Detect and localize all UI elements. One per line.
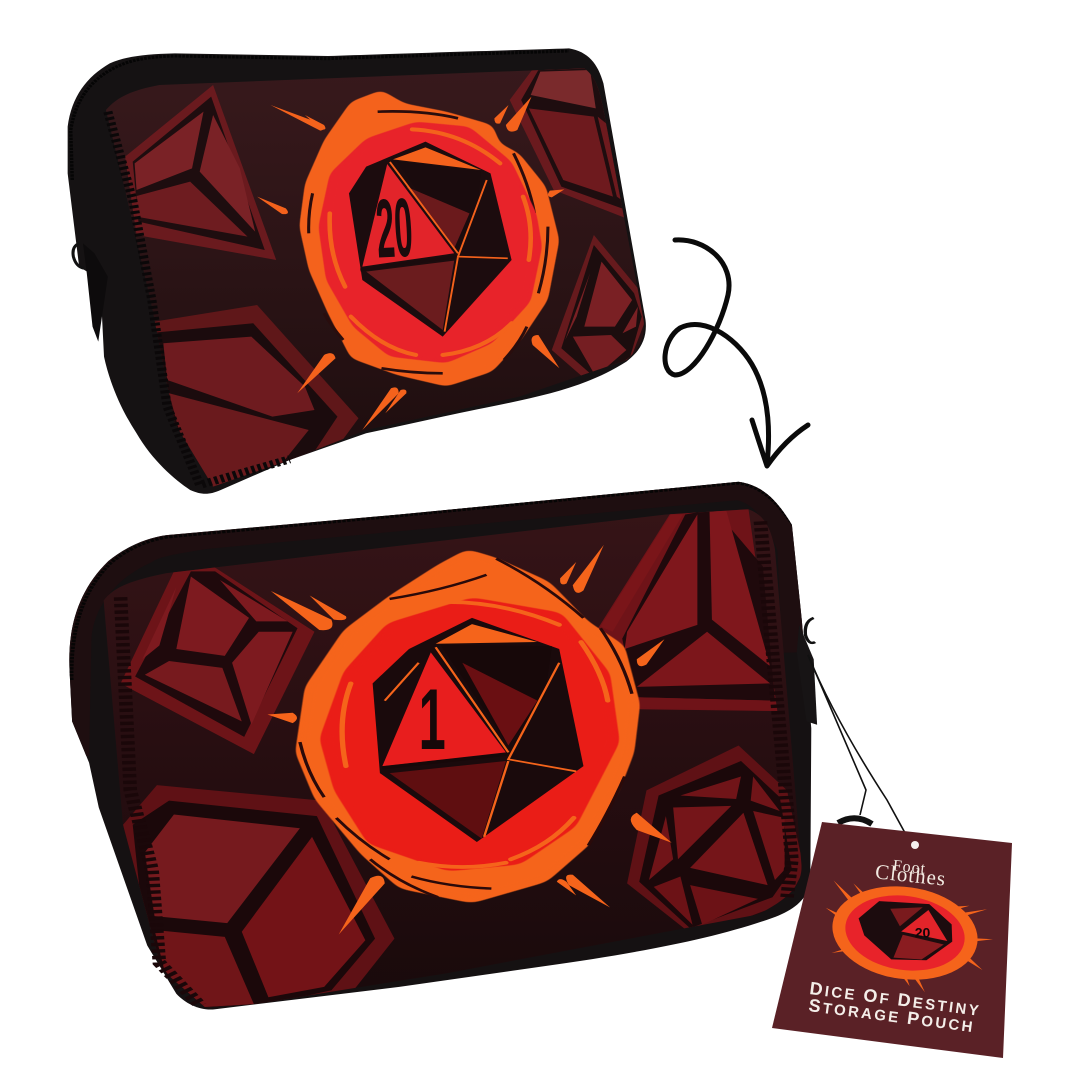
tag logo: Clothes <box>874 859 947 891</box>
orange splash ring <box>295 549 640 903</box>
orange streaks on ring <box>330 129 531 355</box>
bottom pouch (natural 1) <box>69 482 817 1018</box>
orange streaks on ring <box>342 602 608 867</box>
die: lower right <box>627 745 804 937</box>
die: upper right <box>510 68 624 218</box>
tag artwork: 20 <box>915 924 931 940</box>
red inner ring <box>318 122 542 363</box>
pouch body <box>69 482 811 1010</box>
die: tetrahedron upper left <box>125 85 276 260</box>
tag title: STORAGE POUCH <box>807 995 976 1036</box>
zipper teeth <box>71 51 569 180</box>
printed panel <box>89 501 816 1018</box>
d20 outline <box>349 142 512 337</box>
tag artwork <box>816 876 999 1001</box>
die: lower right <box>552 235 646 388</box>
printed panel <box>91 60 657 500</box>
stitched seam <box>108 112 290 485</box>
die: upper left <box>121 564 314 754</box>
burst spikes <box>257 97 564 430</box>
curly arrow <box>665 240 808 466</box>
die: upper right <box>598 508 777 711</box>
ring dark accents <box>309 111 548 373</box>
number 1: 1 <box>419 671 446 767</box>
tag strings <box>808 655 910 842</box>
tag burst spikes <box>816 880 998 1001</box>
tag logo: Foot <box>892 857 927 878</box>
zipper pull <box>797 618 817 725</box>
ring dark accents <box>300 559 632 897</box>
top pouch (d20) <box>68 48 657 500</box>
inner orange highlight <box>436 624 537 644</box>
d20 faces <box>382 645 576 839</box>
tag title: DICE OF DESTINY <box>808 978 982 1020</box>
stitched seam <box>121 521 792 1006</box>
d20 faces <box>360 162 508 332</box>
orange splash ring <box>299 90 559 387</box>
pouch body <box>68 48 646 494</box>
number 20: 20 <box>374 182 415 276</box>
zipper band <box>72 483 797 756</box>
red inner ring <box>319 597 620 871</box>
d20 outline <box>373 618 583 842</box>
hang tag <box>772 822 1012 1058</box>
die: lower left <box>123 785 394 1008</box>
inner orange highlight <box>393 147 481 170</box>
burst spikes <box>267 545 672 934</box>
die: lower left <box>144 305 359 488</box>
tag hole <box>911 841 919 849</box>
zipper pull <box>73 243 108 342</box>
tag card <box>772 822 1012 1058</box>
